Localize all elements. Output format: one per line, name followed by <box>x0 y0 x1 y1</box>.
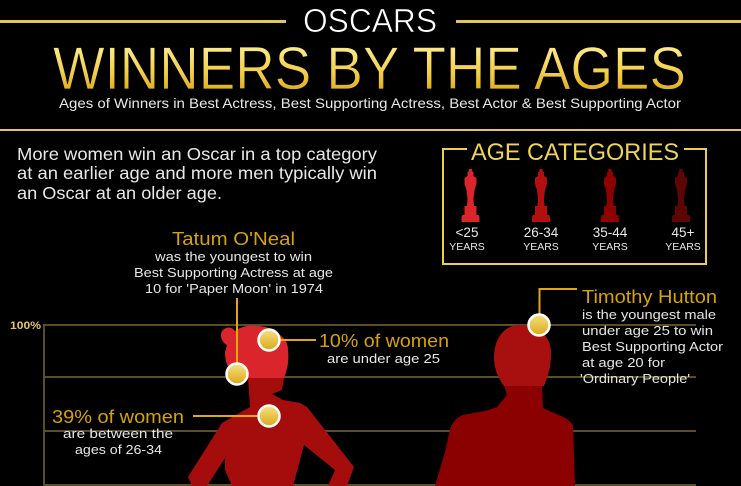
callout: Timothy Hutton: Timothy Hutton <box>582 286 717 307</box>
callout: Tatum O'Neal: 10 for 'Paper Moon' in 1974 <box>145 281 323 296</box>
header rule left <box>0 20 286 23</box>
callout: 39% of women: ages of 26-34 <box>75 442 162 457</box>
callout: Timothy Hutton: 'Ordinary People' <box>580 371 690 386</box>
age labels: 45+ <box>672 225 695 240</box>
header bottom rule <box>0 129 741 131</box>
age labels <box>449 225 701 253</box>
callout: 39% of women: are between the <box>63 426 173 441</box>
age labels: YEARS <box>592 241 628 253</box>
callout: Timothy Hutton: under age 25 to win <box>582 323 713 338</box>
age labels: YEARS <box>523 241 559 253</box>
callout: Timothy Hutton: is the youngest male <box>582 307 716 322</box>
man body <box>435 386 575 486</box>
intro text <box>17 144 377 203</box>
chart grid <box>43 324 696 486</box>
woman head <box>221 326 288 378</box>
callout: 10% of women <box>258 330 449 366</box>
panel: age categories <box>443 139 706 264</box>
callout: Timothy Hutton: Best Supporting Actor <box>582 339 724 354</box>
callout: 10% of women: 10% of women <box>319 330 449 351</box>
age labels: YEARS <box>449 241 485 253</box>
callout: 39% of women: 39% of women <box>52 406 184 427</box>
callout: Timothy Hutton: at age 20 for <box>582 355 666 370</box>
man head <box>494 325 551 386</box>
callout: Timothy Hutton <box>528 286 724 386</box>
axis label: 100%: 100% <box>10 320 41 332</box>
title: WINNERS BY THE AGES <box>53 35 686 102</box>
icon: statue 45+ <box>672 169 690 222</box>
heading: age categories: AGE CATEGORIES <box>471 139 679 166</box>
callout: Tatum O'Neal: Best Supporting Actress at age <box>134 265 333 280</box>
woman silhouette <box>188 326 354 486</box>
age labels: YEARS <box>665 241 701 253</box>
callout: 10% of women: are under age 25 <box>327 351 440 366</box>
icon: statue under 25 <box>462 169 480 222</box>
man silhouette <box>435 325 575 486</box>
callout: 39% of women <box>52 406 280 457</box>
callout: Tatum O'Neal: was the youngest to win <box>154 249 312 264</box>
heading: Oscars: OSCARS <box>303 2 437 39</box>
age labels: <25 <box>456 225 478 240</box>
header rule right <box>456 20 741 23</box>
woman body <box>188 378 354 486</box>
intro text: More women win an Oscar in a top category <box>17 144 377 164</box>
icon: statue 26-34 <box>532 169 550 222</box>
intro text: at an earlier age and more men typically win <box>17 163 377 183</box>
subtitle: Ages of Winners in Best Actress, Best Supporting Actress, Best Actor & Best Supporting Actor <box>59 95 681 111</box>
age labels: 26-34 <box>524 225 559 240</box>
callout: Tatum O'Neal <box>134 228 333 384</box>
intro text: an Oscar at an older age. <box>17 183 222 203</box>
age labels: 35-44 <box>593 225 628 240</box>
icon: statue 35-44 <box>601 169 619 222</box>
callout: Tatum O'Neal: Tatum O'Neal <box>172 228 295 249</box>
